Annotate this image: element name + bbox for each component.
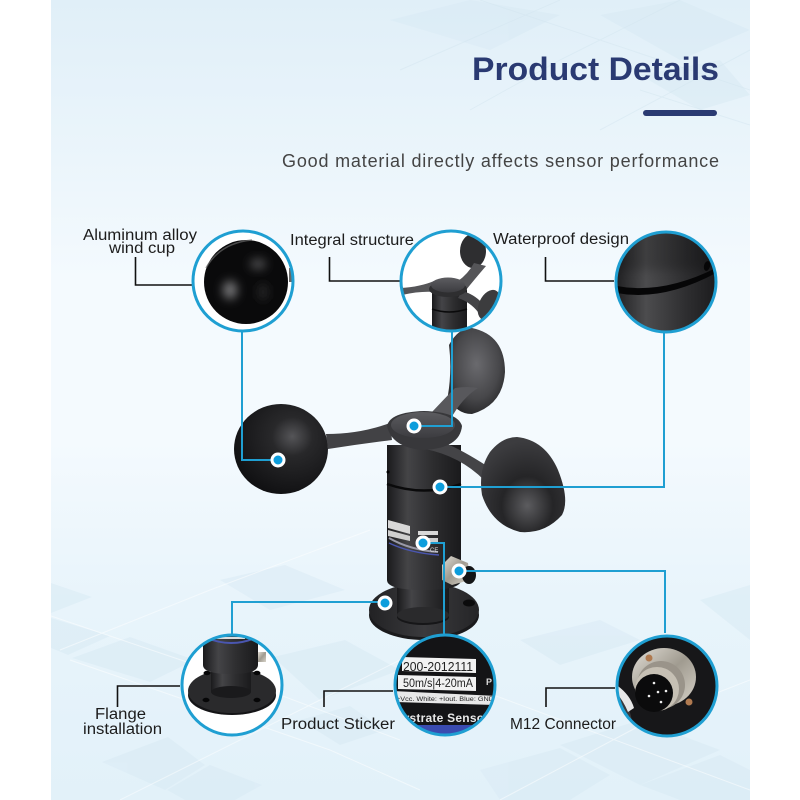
detail circle: product sticker: P xyxy=(486,677,492,687)
label: flange installation: installation xyxy=(83,721,162,738)
sensor body xyxy=(386,445,461,590)
body sticker: CE xyxy=(430,548,438,554)
label: flange installation: Flange xyxy=(95,706,146,723)
label: aluminum alloy wind cup: wind cup xyxy=(108,240,175,257)
hub xyxy=(387,411,462,450)
top arm xyxy=(432,387,478,420)
label: aluminum alloy wind cup xyxy=(83,227,197,257)
right arm xyxy=(425,443,487,480)
label: integral structure: Integral structure xyxy=(290,232,414,249)
label: aluminum alloy wind cup: Aluminum alloy xyxy=(83,227,197,244)
anemometer product xyxy=(234,328,565,640)
detail circle: product sticker: 200-2012111 xyxy=(403,660,473,674)
body sticker xyxy=(388,520,439,555)
label: M12 connector: M12 Connector xyxy=(510,716,616,733)
detail circle: product sticker xyxy=(390,635,500,737)
connector xyxy=(442,556,476,585)
title underline bar xyxy=(643,110,717,116)
top cup xyxy=(448,328,505,414)
label: product sticker: Product Sticker xyxy=(281,716,395,733)
hotspot dots xyxy=(272,420,465,609)
label: flange installation xyxy=(83,706,162,738)
detail circle: integral structure xyxy=(400,231,505,340)
detail circle: wind cup xyxy=(193,231,294,331)
detail circle: product sticker: +Vcc. White: +Iout. Blue: GND xyxy=(396,696,494,703)
title: Product Details xyxy=(472,51,719,87)
label leader lines xyxy=(118,257,615,707)
detail circle: product sticker: 50m/s|4-20mA xyxy=(403,678,473,690)
detail circle: flange installation xyxy=(182,635,282,735)
left cup xyxy=(234,404,328,494)
left arm xyxy=(326,423,392,449)
label: waterproof design: Waterproof design xyxy=(493,231,629,248)
detail circle: waterproof design xyxy=(610,230,722,332)
callout leader lines xyxy=(232,332,665,634)
subtitle: Good material directly affects sensor performance xyxy=(282,151,719,171)
flange base xyxy=(369,583,479,640)
detail circle: M12 connector xyxy=(615,636,717,740)
right cup xyxy=(481,437,565,532)
detail circle: product sticker: irstrate Sensor xyxy=(401,711,489,725)
